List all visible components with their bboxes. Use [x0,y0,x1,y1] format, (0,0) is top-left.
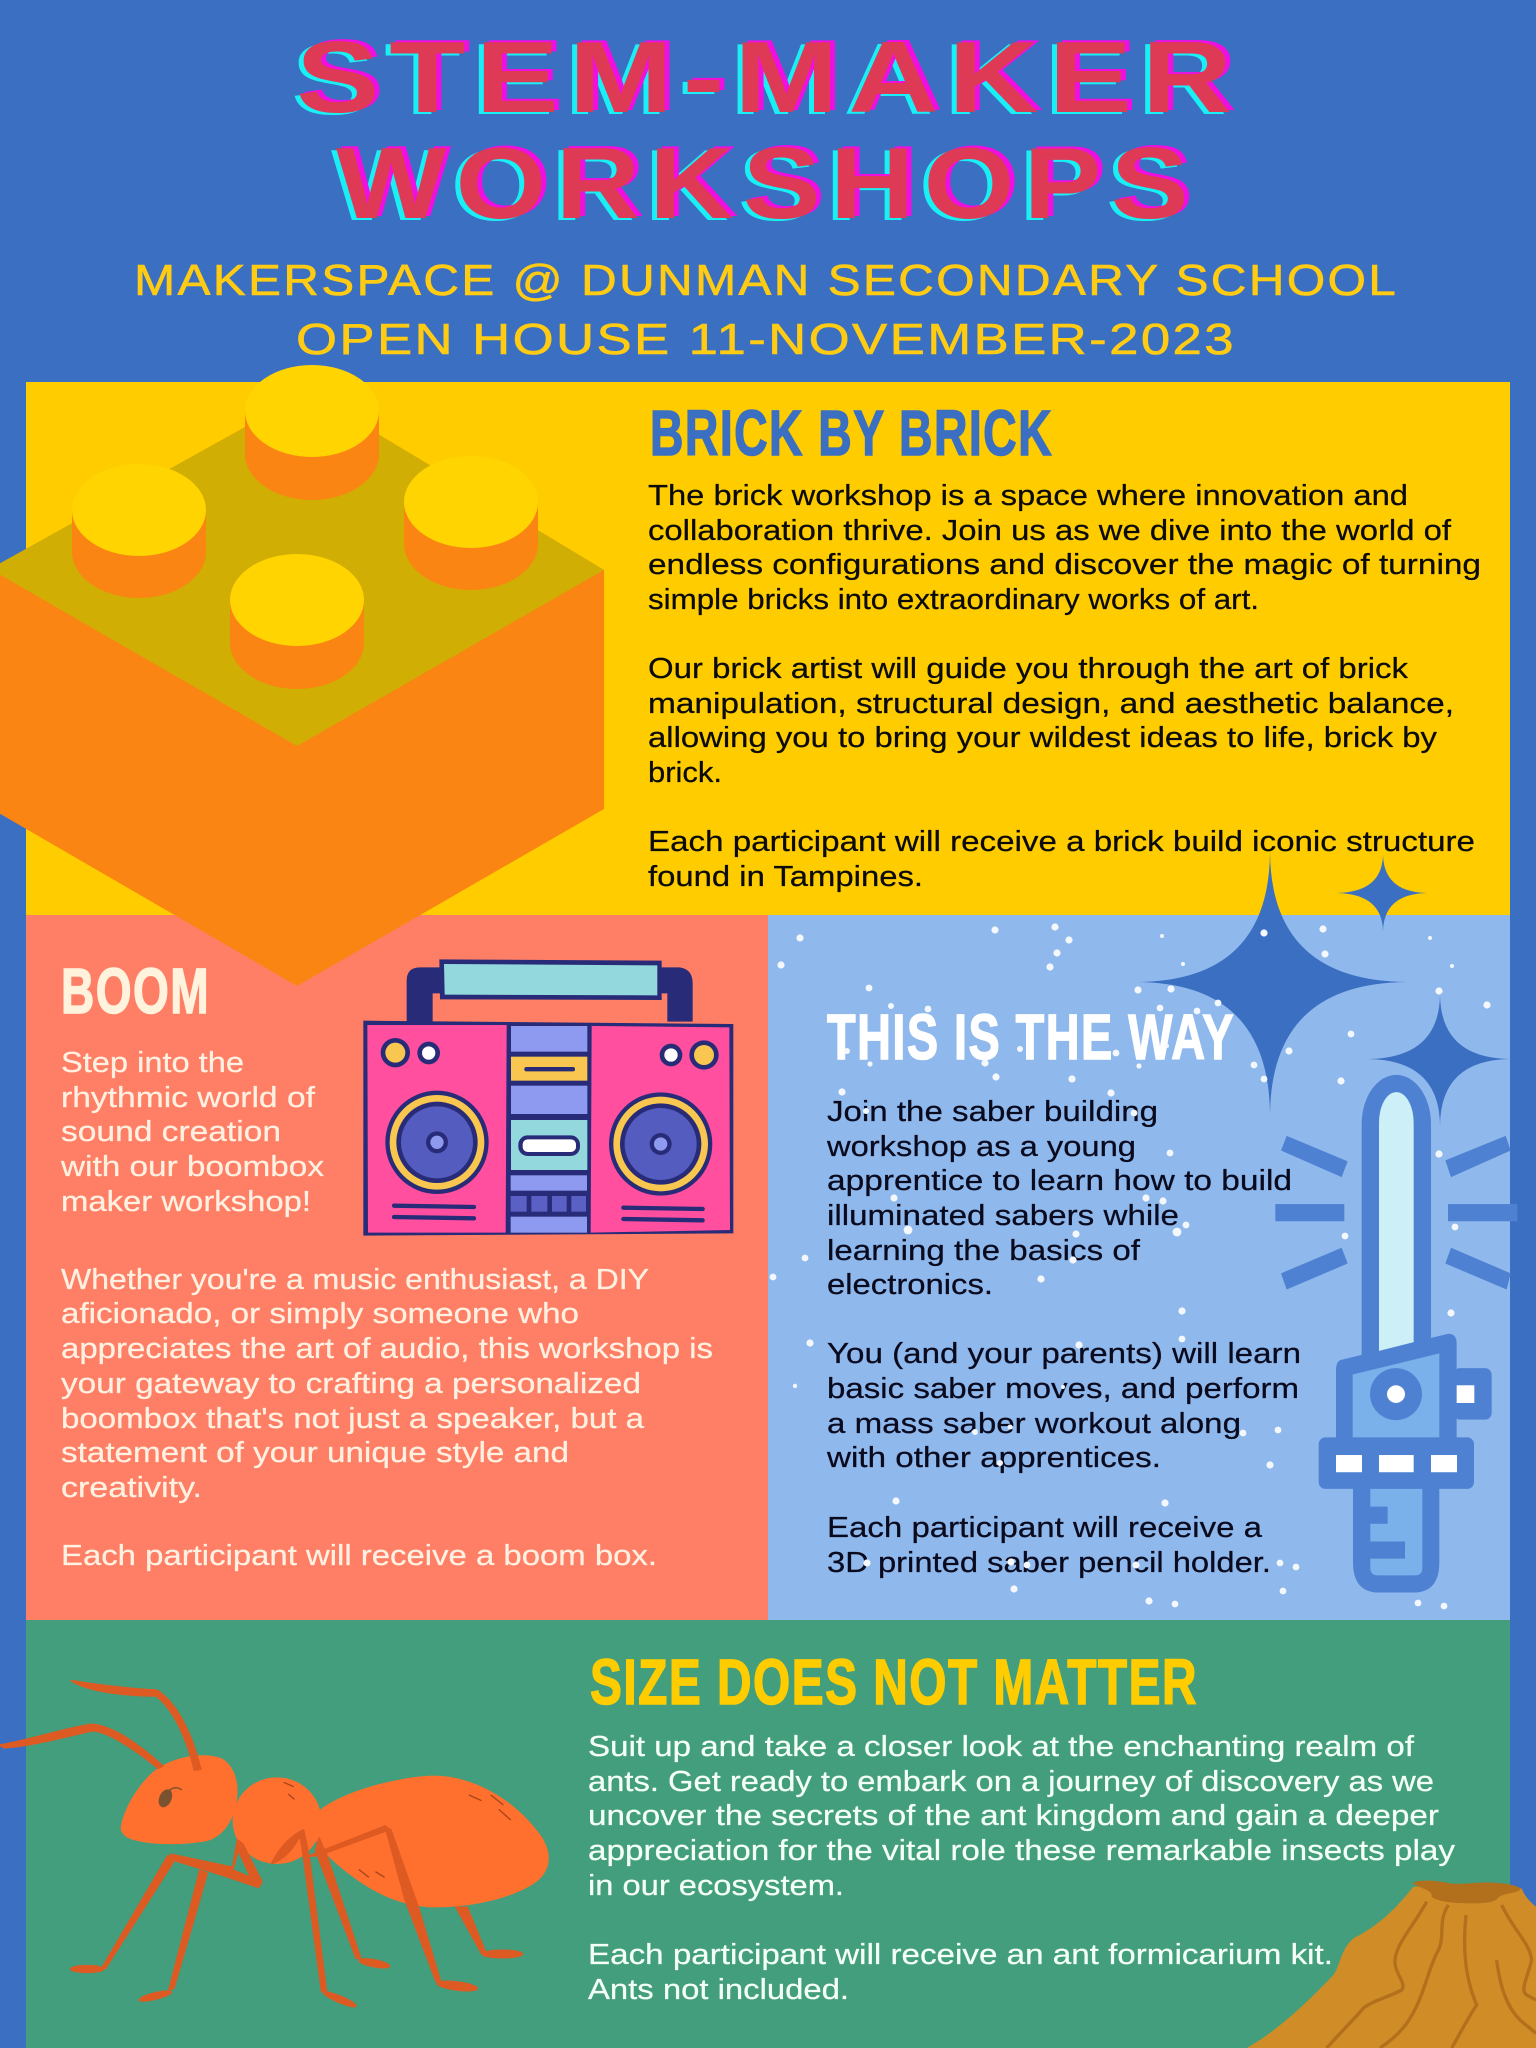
subtitle [134,256,1398,364]
icon: volcano anthill [1247,1881,1536,2048]
text block: boom description: aficionado, or simply someone who [61,1298,579,1330]
text block: boom description: Each participant will receive a boom box. [61,1540,657,1572]
text block: boom description: with our boombox [60,1151,324,1183]
text block: saber description: Each participant will receive a [827,1512,1262,1544]
title: STEM-MAKER [301,20,1247,132]
text block: saber description: electronics. [827,1269,993,1301]
text block: ant description: in our ecosystem. [588,1870,844,1902]
text block: boom description: Whether you're a music enthusiast, a DIY [61,1264,649,1296]
text block: boom description: maker workshop! [61,1186,311,1218]
text block: brick description: simple bricks into extraordinary works of art. [648,584,1259,616]
title: STEM-MAKER [296,22,1242,134]
text block: boom description: creativity. [61,1472,202,1504]
text block: saber description: You (and your parents) will learn [827,1338,1301,1370]
text block: boom description [60,1047,713,1572]
text block: saber description: a mass saber workout along [827,1408,1241,1440]
text block: boom description: Step into the [61,1047,244,1079]
text block: saber description [826,1096,1301,1579]
panel: brick by brick [26,382,1510,915]
stud: right [404,456,538,590]
icon: sparkle stars [1137,852,1510,1125]
stud: back [245,365,379,500]
text block: ant description: Suit up and take a closer look at the enchanting realm of [588,1731,1414,1763]
icon: ant [0,1681,549,2009]
text block: saber description: workshop as a young [826,1131,1136,1163]
text block: boom description: appreciates the art of audio, this workshop is [61,1333,713,1365]
panel: this is the way [768,852,1517,1620]
icon: light saber [1275,1075,1517,1593]
text block: boom description: rhythmic world of [61,1082,315,1114]
text block: boom description: statement of your unique style and [61,1437,569,1469]
text block: saber description: with other apprentices. [826,1442,1161,1474]
heading: brick by brick: BRICK BY BRICK [650,397,1053,469]
text block: boom description: your gateway to crafting a personalized [61,1368,641,1400]
text block: saber description: basic saber moves, and perform [827,1373,1299,1405]
text block: ant description: Ants not included. [588,1974,849,2006]
text block: ant description: Each participant will receive an ant formicarium kit. [588,1939,1333,1971]
text block: saber description: learning the basics of [827,1235,1140,1267]
stud: front [230,554,364,689]
text block: saber description: apprentice to learn how to build [827,1165,1292,1197]
text block: brick description: allowing you to bring your wildest ideas to life, brick by [648,722,1438,754]
heading: size does not matter: SIZE DOES NOT MATTER [590,1646,1198,1718]
text block: brick description [648,480,1481,893]
text block: boom description: boombox that's not just a speaker, but a [61,1403,644,1435]
subtitle: MAKERSPACE @ DUNMAN SECONDARY SCHOOL [134,256,1398,305]
text block: brick description: Our brick artist will guide you through the art of brick [648,653,1409,685]
title: WORKSHOPS [336,128,1198,240]
text block: brick description: manipulation, structural design, and aesthetic balance, [648,688,1454,720]
heading: this is the way: THIS IS THE WAY [827,1001,1235,1073]
icon: lego brick [0,365,604,986]
text block: ant description: appreciation for the vital role these remarkable insects play [588,1835,1456,1867]
panel: boom [26,915,768,1620]
title: WORKSHOPS [331,130,1193,242]
text block: brick description: The brick workshop is a space where innovation and [648,480,1408,512]
stud: left [72,464,206,598]
text block: boom description: sound creation [61,1116,281,1148]
white speckles [770,923,1491,1609]
subtitle: OPEN HOUSE 11-NOVEMBER-2023 [296,315,1236,364]
text block: brick description: brick. [648,757,722,789]
title: STEM-MAKER [291,24,1237,136]
text block: brick description: endless configurations and discover the magic of turning [648,549,1481,581]
text block: saber description: illuminated sabers while [827,1200,1179,1232]
text block: ant description: uncover the secrets of the ant kingdom and gain a deeper [588,1800,1440,1832]
text block: brick description: collaboration thrive. Join us as we dive into the world of [648,515,1451,547]
text block: ant description: ants. Get ready to embark on a journey of discovery as we [588,1766,1434,1798]
text block: saber description: Join the saber building [827,1096,1158,1128]
title [291,20,1247,242]
icon: boombox [363,959,733,1236]
panel: size does not matter [0,1620,1536,2048]
text block: ant description [588,1731,1456,2006]
heading: boom: BOOM [61,955,210,1027]
title: WORKSHOPS [341,126,1203,238]
text block: brick description: found in Tampines. [648,861,923,893]
text block: saber description: 3D printed saber pencil holder. [827,1547,1271,1579]
text block: brick description: Each participant will receive a brick build iconic structure [648,826,1475,858]
